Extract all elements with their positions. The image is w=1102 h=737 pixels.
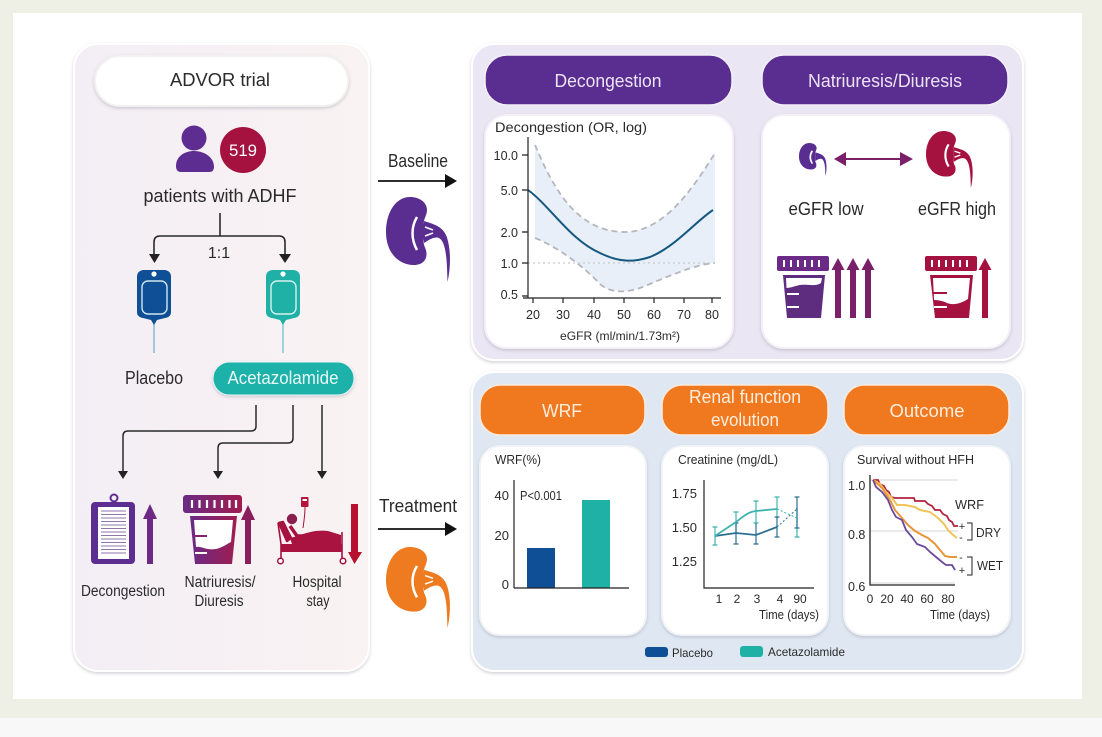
card: WRF bar chart: [480, 446, 646, 635]
heading: Renal function evolution: Renal function: [689, 387, 801, 407]
chart title: Survival without HFH: [857, 453, 974, 467]
badge: 519 patients: 519: [229, 141, 257, 160]
heading: Decongestion: [485, 55, 732, 105]
icon: hospital stay: [278, 497, 362, 564]
line chart: 90: [793, 592, 807, 606]
survival curves: 80: [941, 592, 955, 606]
card: survival chart: [844, 446, 1010, 635]
label: Hospital stay: Hospital: [292, 574, 342, 591]
heading: WRF: [480, 385, 645, 435]
icon: red urine cup with one arrow: [925, 256, 992, 318]
survival curves: 40: [900, 592, 914, 606]
survival curves: WRF: [955, 498, 984, 512]
line chart: 3: [754, 592, 761, 606]
panel: baseline results: [472, 44, 1023, 360]
label: Natriuresis/Diuresis: [184, 574, 256, 610]
line chart: 1.50: [672, 520, 697, 535]
icon: purple urine cup with three arrows: [777, 256, 874, 318]
icon: placebo IV bag: [137, 270, 171, 353]
icon: orange kidney: [386, 547, 450, 628]
chart: spline curve: [494, 137, 721, 343]
heading: ADVOR trial: ADVOR trial: [170, 70, 270, 90]
survival curves: 60: [920, 592, 934, 606]
icon: natriuresis cup: [183, 495, 255, 564]
heading: ADVOR trial: [95, 56, 348, 106]
label: Hospital stay: [292, 574, 342, 610]
heading: Decongestion: Decongestion: [554, 71, 662, 91]
arrow: two-way: [834, 152, 913, 166]
heading: Outcome: [844, 385, 1009, 435]
chart: spline curve: eGFR (ml/min/1.73m²): [560, 329, 680, 343]
survival curves: WET: [977, 559, 1003, 573]
survival curves: DRY: [976, 526, 1002, 540]
legend: Acetazolamide: [768, 645, 845, 659]
text: eGFR high: eGFR high: [918, 199, 996, 219]
icon: small kidney: [799, 143, 827, 176]
card: creatinine line chart: [662, 446, 828, 635]
arrow: baseline: Baseline: [388, 151, 448, 171]
survival curves: Time (days): [930, 608, 990, 622]
survival curves: 0.8: [848, 528, 865, 542]
chart: spline curve: 40: [587, 308, 601, 322]
icon: decongestion clipboard: [91, 494, 157, 564]
arrows: acetazolamide effects: [118, 405, 327, 479]
heading: Renal function evolution: [662, 385, 828, 435]
label: Acetazolamide: [213, 362, 354, 395]
arrow: treatment: [378, 496, 457, 536]
arrow: 1:1 randomisation: [149, 213, 291, 263]
text: Placebo: Placebo: [125, 368, 183, 388]
survival curves: -: [959, 552, 963, 564]
arrow: 1:1 randomisation: 1:1: [208, 245, 230, 262]
label: Natriuresis/Diuresis: Natriuresis/: [184, 574, 256, 591]
chart title: Creatinine (mg/dL): [678, 452, 778, 467]
label: Decongestion: Decongestion: [81, 583, 165, 600]
chart: spline curve: 0.5: [501, 288, 518, 302]
line chart: 1.75: [672, 486, 697, 501]
chart: spline curve: 50: [617, 308, 631, 322]
heading: WRF: WRF: [542, 401, 582, 421]
bar chart: P<0.001: [520, 489, 562, 503]
heading: Renal function evolution: evolution: [711, 410, 779, 430]
survival curves: 0: [867, 592, 874, 606]
icon: purple kidney: [386, 197, 450, 282]
survival curves: 20: [880, 592, 894, 606]
survival curves: +: [959, 521, 965, 533]
bar chart: 0: [502, 577, 509, 592]
legend: Placebo: [672, 646, 713, 660]
icon: large kidney: [926, 131, 973, 188]
survival curves: 1.0: [848, 479, 865, 493]
panel: treatment results: [472, 372, 1023, 671]
label: Acetazolamide: Acetazolamide: [228, 368, 338, 388]
arrow: baseline: [378, 151, 457, 188]
chart: spline curve: 5.0: [501, 184, 518, 198]
chart title: Decongestion (OR, log): [495, 119, 647, 135]
chart title: WRF(%): [495, 452, 541, 467]
badge: 519 patients: [220, 127, 266, 173]
chart: spline curve: 60: [647, 308, 661, 322]
heading: Natriuresis/Diuresis: Natriuresis/Diuresis: [808, 71, 962, 91]
text: eGFR low: eGFR low: [788, 199, 864, 219]
arrow: treatment: Treatment: [379, 496, 457, 516]
line chart: 2: [734, 592, 741, 606]
chart: spline curve: 70: [677, 308, 691, 322]
line chart: Time (days): [759, 608, 819, 622]
line chart: 1.25: [672, 554, 697, 569]
survival curves: -: [959, 532, 963, 544]
bar chart: [495, 480, 629, 592]
line chart: [672, 480, 819, 622]
icon: patient: [176, 126, 214, 172]
line chart: 4: [777, 592, 784, 606]
heading: Natriuresis/Diuresis: [762, 55, 1008, 105]
survival curves: [848, 475, 1003, 622]
survival curves: 0.6: [848, 580, 865, 594]
card: natriuresis diuresis: [762, 115, 1010, 348]
legend: [645, 645, 845, 660]
bar chart: 20: [495, 528, 509, 543]
chart: spline curve: 10.0: [494, 149, 518, 163]
label: Natriuresis/Diuresis: Diuresis: [194, 593, 244, 610]
survival curves: +: [959, 565, 965, 577]
chart: spline curve: 80: [705, 308, 719, 322]
bar chart: 40: [495, 488, 509, 503]
chart: spline curve: 1.0: [501, 257, 518, 271]
chart: spline curve: 2.0: [501, 226, 518, 240]
heading: Outcome: Outcome: [890, 401, 964, 421]
line chart: 1: [716, 592, 723, 606]
chart: spline curve: 20: [526, 308, 540, 322]
text: patients with ADHF: patients with ADHF: [144, 186, 297, 206]
panel: ADVOR trial: [74, 44, 369, 671]
card: decongestion chart: [485, 115, 733, 348]
label: Hospital stay: stay: [306, 593, 330, 610]
chart: spline curve: 30: [556, 308, 570, 322]
icon: acetazolamide IV bag: [266, 270, 300, 353]
